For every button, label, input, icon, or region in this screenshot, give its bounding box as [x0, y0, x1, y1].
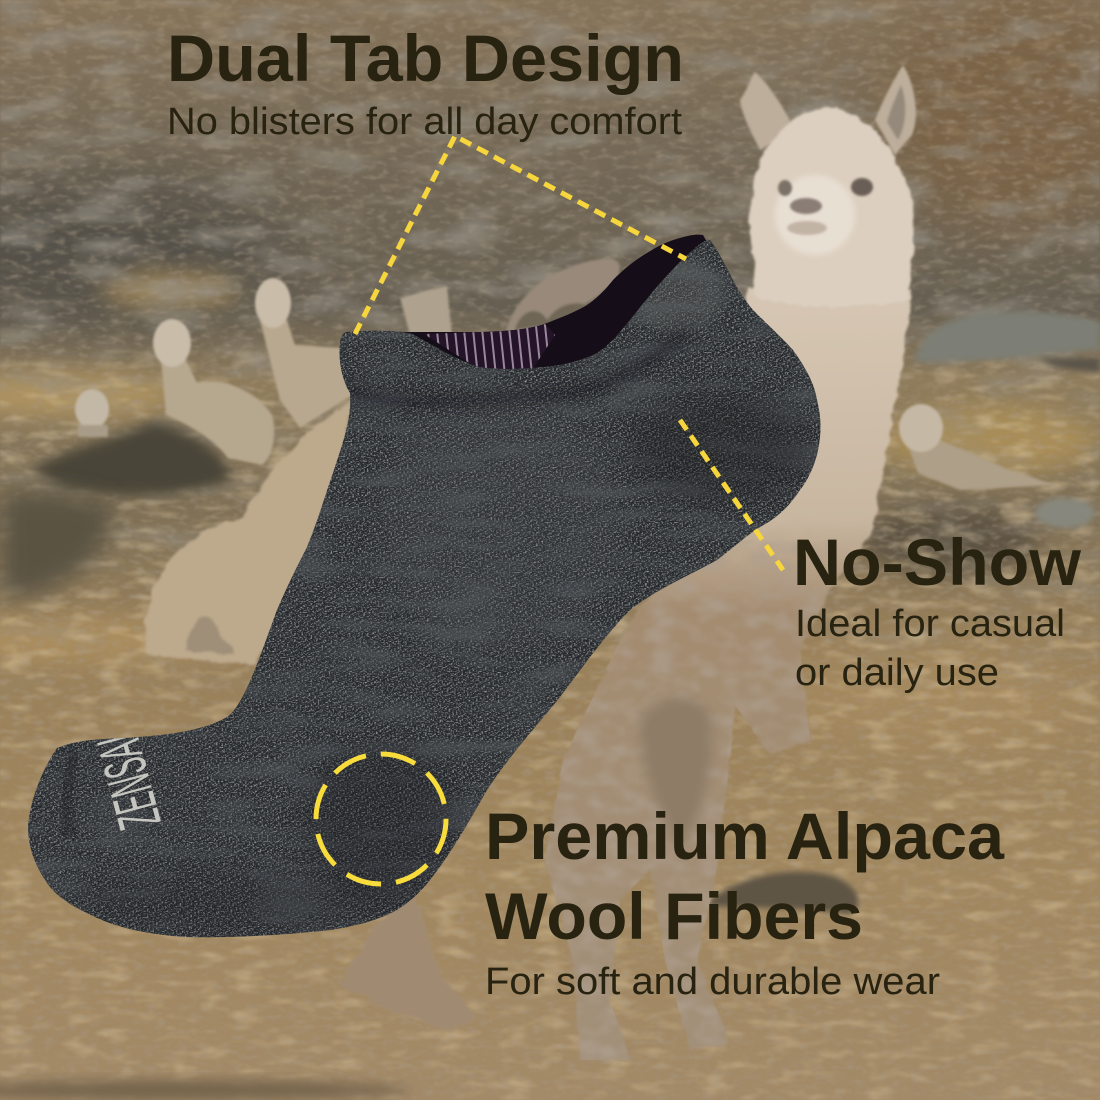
nose: [790, 198, 822, 214]
mouth: [787, 221, 827, 235]
alpaca: right seated: [899, 404, 1055, 490]
sock shading: [20, 230, 830, 950]
heading: no-show: No-Show: [793, 525, 1082, 599]
dark ledge right: [1040, 358, 1100, 372]
sock: [20, 230, 830, 950]
right eye: [851, 178, 873, 196]
ears: [740, 65, 916, 155]
text block: no-show: [793, 525, 1082, 694]
left eye: [778, 180, 792, 196]
rocks right: [915, 312, 1100, 362]
subheading: daily use: or daily use: [795, 652, 999, 694]
main body: [545, 287, 912, 1060]
rock small right: [1035, 498, 1095, 528]
alpaca: left seated: [153, 319, 274, 465]
text block: premium alpaca wool fibers: [485, 799, 1005, 1003]
text block: dual tab design: [167, 21, 684, 143]
sock inner stripes: [424, 324, 555, 370]
sock inner opening: [346, 235, 718, 372]
alpaca: small far left: [75, 389, 109, 437]
heading: premium alpaca: Premium Alpaca: [485, 799, 1005, 873]
subheading: ideal for casual: Ideal for casual: [795, 603, 1065, 645]
face: [775, 175, 855, 255]
alpaca: main: [340, 65, 916, 1080]
alpaca: small behind sock: [400, 258, 620, 335]
heading: wool fibers: Wool Fibers: [485, 879, 863, 953]
subheading: no blisters: No blisters for all day comfort: [167, 101, 682, 143]
callout: dual tab dashed line: [355, 136, 686, 334]
heading: dual tab design: Dual Tab Design: [167, 21, 684, 95]
callout: no-show dashed line: [680, 420, 783, 570]
callout: fibre dashed circle: [316, 754, 446, 884]
sock brand logo: ZENSAH: [81, 715, 174, 836]
dark mound lower right: [705, 872, 858, 915]
dark mound left: [30, 422, 233, 495]
inner ear: [887, 85, 905, 140]
dark ground bottom: [0, 1080, 410, 1100]
subheading: soft and durable: For soft and durable wear: [485, 961, 940, 1003]
fur texture: [530, 540, 830, 1080]
alpaca: left large body: [146, 403, 350, 665]
head fluff: [750, 108, 913, 307]
alpaca: standing left: [255, 278, 352, 428]
far legs: [340, 895, 480, 1030]
sock body: [28, 240, 820, 937]
dark hollows left: [0, 492, 113, 600]
